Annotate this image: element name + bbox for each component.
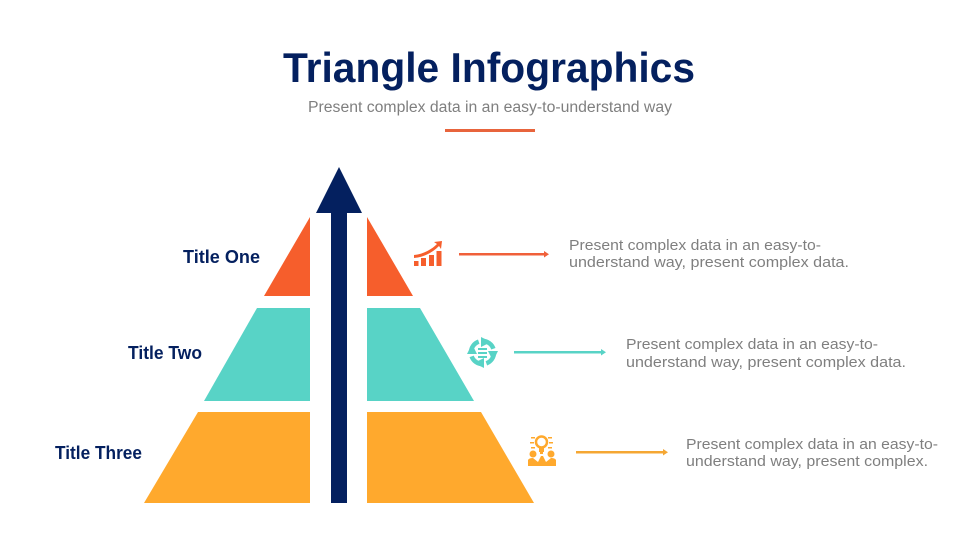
tier 2: teal [204,308,474,401]
arrow: row 1 [459,251,549,258]
text: row 3: Present complex data in an easy-to- [686,436,938,453]
central arrow [316,167,362,503]
title underline [445,129,535,132]
label: Title Two: Title Two [128,343,202,363]
arrow: row 3 [576,449,668,456]
text: row 3: understand way, present complex. [686,453,928,470]
text: row 2: Present complex data in an easy-to- [626,336,878,353]
icon: cycle with list [467,337,498,368]
arrow: row 2 [514,349,606,356]
label: Title Three: Title Three [55,443,142,463]
icon: growth chart [414,241,442,266]
text: row 1: understand way, present complex data. [569,254,849,271]
label: Title One: Title One [183,247,260,267]
subtitle: Present complex data in an easy-to-understand way [308,99,672,116]
tier 1: orange [264,217,413,296]
text: row 1: Present complex data in an easy-to- [569,237,821,254]
text: row 2: understand way, present complex data. [626,354,906,371]
pyramid [144,167,534,503]
title: Triangle Infographics [283,44,695,91]
tier 3: yellow [144,412,534,503]
icon: lightbulb with people [528,436,556,466]
